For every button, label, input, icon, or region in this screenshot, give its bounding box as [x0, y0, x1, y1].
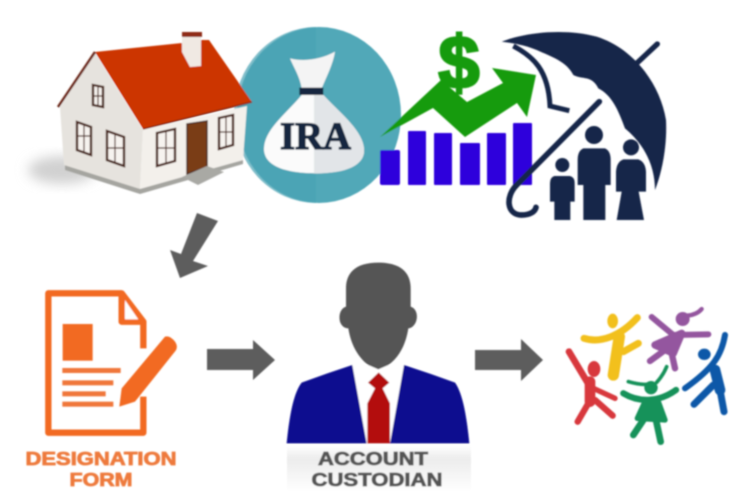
- caption background: [287, 445, 471, 492]
- label: account custodian: CUSTODIAN: [312, 470, 442, 490]
- tie: [367, 372, 390, 443]
- person: child: [555, 158, 569, 172]
- person: woman: [623, 139, 639, 155]
- umbrella rib: [513, 46, 569, 111]
- icon: designation form: [48, 293, 177, 433]
- windows: [77, 85, 233, 166]
- label: designation form: FORM: [70, 470, 132, 490]
- roof: [95, 40, 252, 129]
- label: IRA: IRA: [280, 115, 351, 158]
- umbrella handle: [509, 102, 599, 215]
- arrow: form to custodian: [207, 340, 275, 380]
- child: yellow: [584, 314, 638, 375]
- icon: house: [28, 32, 252, 194]
- label: account custodian: [312, 449, 442, 490]
- icon: account custodian: [287, 263, 469, 443]
- child: red: [569, 352, 615, 422]
- icon: dollar sign: $: [438, 21, 480, 104]
- arrow: custodian to beneficiaries: [475, 339, 543, 381]
- icon: umbrella over family: [502, 32, 666, 220]
- icon: children group: [569, 309, 725, 442]
- arrow: down-left: [170, 213, 218, 278]
- umbrella canopy: [502, 32, 666, 190]
- label: account custodian: ACCOUNT: [318, 449, 428, 469]
- icon: green rising arrow: [380, 68, 536, 137]
- person: adult: [585, 126, 603, 144]
- child: blue: [685, 335, 725, 412]
- icon: blue bar chart: [380, 123, 532, 185]
- label: designation form: DESIGNATION: [26, 449, 176, 469]
- child: green: [623, 367, 676, 442]
- chimney: [182, 33, 201, 67]
- door: [187, 121, 207, 174]
- shirt: [352, 365, 405, 443]
- umbrella tip: [637, 44, 657, 63]
- icon: IRA money bag circle: [234, 27, 401, 203]
- label: designation form: [26, 449, 176, 490]
- jacket left: [287, 365, 367, 443]
- child: purple: [650, 309, 708, 368]
- jacket right: [390, 365, 469, 443]
- pencil: [119, 336, 177, 407]
- head: [339, 263, 417, 369]
